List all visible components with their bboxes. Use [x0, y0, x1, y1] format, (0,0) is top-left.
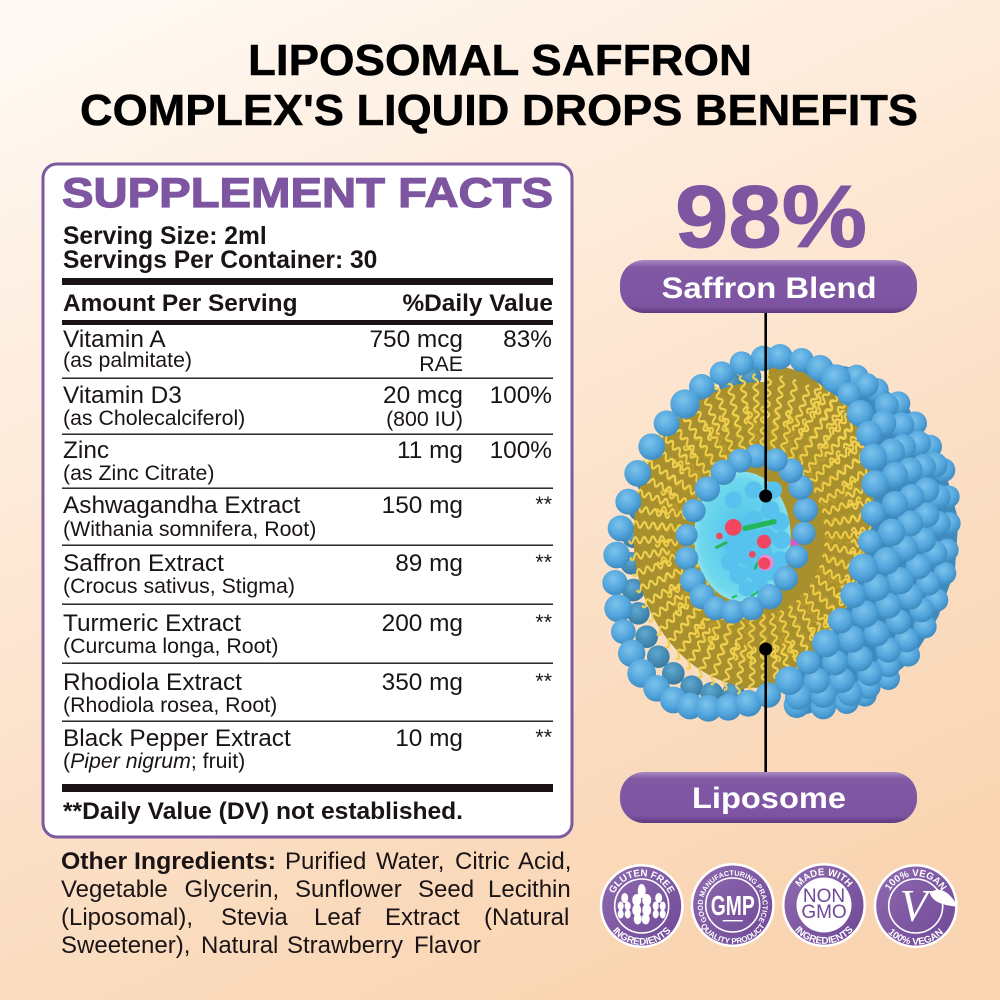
serving information [63, 223, 377, 274]
row: saffron [63, 550, 552, 598]
title: COMPLEX'S LIQUID DROPS BENEFITS [80, 86, 918, 135]
badge: vegan: V [900, 880, 933, 931]
badge: vegan [874, 864, 958, 948]
callout: saffron blend [620, 260, 917, 502]
row: turmeric [63, 610, 552, 658]
row: saffron: (Crocus sativus, Stigma) [63, 574, 295, 598]
table rules [62, 278, 553, 792]
other ingredients: Flavor [414, 932, 481, 959]
badge: non GMO: INGREDIENTS [795, 926, 852, 944]
back ring of spheres [620, 365, 761, 705]
row: vitamin A: (as palmitate) [63, 348, 192, 372]
row: black pepper: Black Pepper Extract [63, 725, 291, 752]
row: black pepper: 10 mg [395, 725, 463, 752]
other ingredients: Natural [201, 932, 278, 959]
row: ashwagandha [63, 492, 552, 541]
row: rhodiola: 350 mg [382, 669, 463, 696]
row: vitamin D3: Vitamin D3 [63, 382, 182, 409]
badge: vegan: 100% VEGAN [885, 869, 947, 890]
other ingredients: Extract [385, 904, 460, 931]
badge: GMP [690, 863, 775, 947]
row: zinc [63, 437, 552, 485]
title [80, 36, 918, 135]
other ingredients: Citric [455, 848, 510, 875]
liposome illustration [602, 344, 961, 722]
row: zinc: 100% [490, 437, 552, 464]
other ingredients: (Natural [484, 904, 569, 931]
lipid tails [629, 369, 891, 696]
callout: liposome: Liposome [692, 782, 846, 815]
row: saffron: Saffron Extract [63, 550, 224, 577]
other ingredients: Sweetener), [61, 932, 190, 959]
drug molecules [716, 519, 799, 597]
other ingredients: Glycerin, [184, 876, 279, 903]
callout: liposome [620, 642, 917, 823]
row: zinc: Zinc [63, 437, 109, 464]
title: LIPOSOMAL SAFFRON [248, 36, 752, 85]
other ingredients: Leaf [314, 904, 361, 931]
badge: gluten free: INGREDIENTS [612, 926, 670, 945]
row: turmeric: (Curcuma longa, Root) [63, 634, 278, 658]
badge: vegan: 100% VEGAN [888, 928, 944, 945]
badge: gluten free [600, 864, 684, 948]
other ingredients: (Liposomal), [61, 904, 193, 931]
row: rhodiola: (Rhodiola rosea, Root) [63, 693, 277, 717]
other ingredients: Sunflower [295, 876, 402, 903]
row: vitamin A [63, 326, 552, 376]
serving information: Servings Per Container: 30 [63, 247, 377, 274]
other ingredients: Other Ingredients: [61, 848, 276, 875]
other ingredients: Vegetable [61, 876, 168, 903]
inner ring of spheres [675, 444, 818, 624]
row: vitamin D3: 20 mcg [383, 382, 463, 409]
badge: non GMO: GMO [801, 902, 847, 923]
row: vitamin A: RAE [419, 352, 463, 376]
row: vitamin D3: (as Cholecalciferol) [63, 406, 245, 430]
row: black pepper: ** [535, 725, 552, 749]
other ingredients: Acid, [518, 848, 571, 875]
row: zinc: 11 mg [397, 437, 463, 464]
outer ring of spheres [602, 346, 781, 722]
row: turmeric: ** [535, 610, 552, 634]
panel: supplement facts [43, 164, 572, 837]
row: ashwagandha: (Withania somnifera, Root) [63, 517, 316, 541]
badge: non GMO [782, 863, 866, 947]
lipid backing [740, 363, 883, 690]
row: vitamin D3 [63, 382, 552, 431]
stat: 98%: 98% [675, 167, 867, 266]
table header: Amount Per Serving [63, 290, 297, 317]
row: rhodiola: ** [535, 669, 552, 693]
inner core [694, 472, 799, 602]
other ingredients: Purified [285, 848, 366, 875]
other ingredients: Seed [418, 876, 474, 903]
row: ashwagandha: 150 mg [382, 492, 463, 519]
other ingredients: Water, [376, 848, 444, 875]
badge: non GMO: NON [803, 886, 845, 907]
row: black pepper: (Piper nigrum; fruit) [63, 749, 245, 773]
row: ashwagandha: ** [535, 492, 552, 516]
heading: supplement facts: SUPPLEMENT FACTS [62, 169, 553, 216]
row: saffron: 89 mg [395, 550, 463, 577]
badge: GMP: GMP [711, 890, 755, 921]
other ingredients: Lecithin [488, 876, 571, 903]
outer shell of spheres [767, 344, 961, 719]
row: vitamin D3: 100% [490, 382, 552, 409]
badge: GMP: QUALITY PRODUCT [702, 922, 764, 944]
row: saffron: ** [535, 550, 552, 574]
footnote: **Daily Value (DV) not established. [63, 798, 463, 825]
badge: gluten free: GLUTEN FREE [610, 869, 675, 894]
row: vitamin D3: (800 IU) [386, 407, 463, 431]
callout: saffron blend: Saffron Blend [662, 272, 876, 305]
icon: leaf [930, 890, 958, 907]
row: black pepper [63, 725, 552, 773]
table header: %Daily Value [402, 290, 553, 317]
badge: GMP: GOOD MANUFACTURING PRACTICE [698, 870, 768, 923]
row: rhodiola: Rhodiola Extract [63, 669, 242, 696]
table header [63, 290, 553, 317]
row: turmeric: Turmeric Extract [63, 610, 241, 637]
other ingredients [61, 848, 571, 959]
core spheres [721, 481, 791, 596]
row: vitamin A: 83% [503, 326, 552, 353]
row: ashwagandha: Ashwagandha Extract [63, 492, 300, 519]
icon: wheat [618, 884, 666, 924]
serving information: Serving Size: 2ml [63, 223, 267, 250]
row: turmeric: 200 mg [382, 610, 463, 637]
other ingredients: Stevia [221, 904, 288, 931]
badge: non GMO: MADE WITH [795, 868, 853, 887]
row: vitamin A: Vitamin A [63, 326, 166, 353]
row: zinc: (as Zinc Citrate) [63, 461, 214, 485]
row: rhodiola [63, 669, 552, 717]
row: vitamin A: 750 mcg [369, 326, 463, 353]
other ingredients: Strawberry [287, 932, 403, 959]
